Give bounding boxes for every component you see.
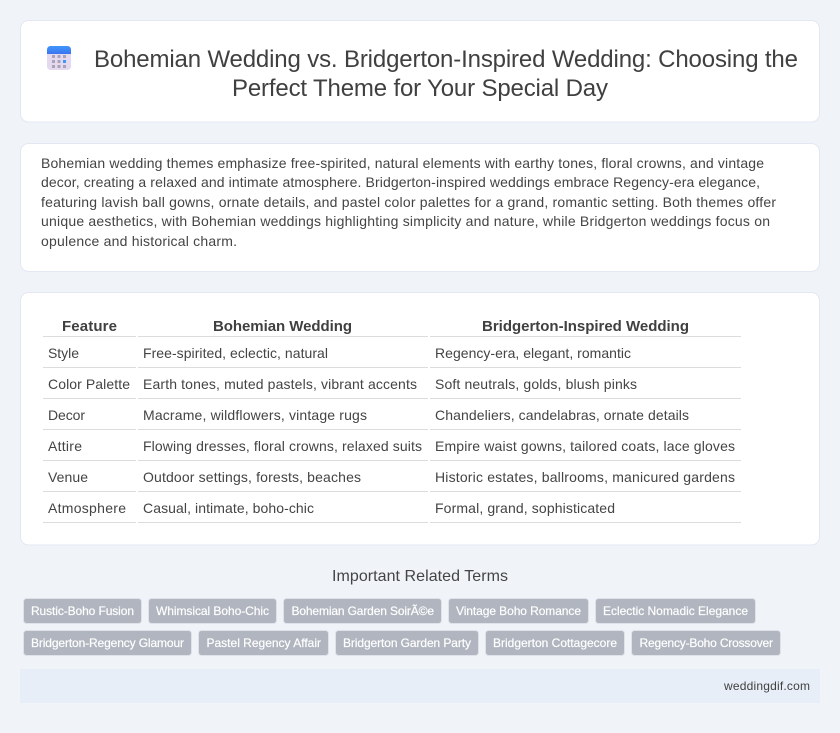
table row: attire bbox=[43, 438, 741, 461]
panel: comparison table card bbox=[20, 292, 820, 545]
title bbox=[94, 46, 798, 102]
tag: Vintage Boho Romance bbox=[448, 598, 588, 624]
table row: style: Regency-era, elegant, romantic bbox=[435, 345, 631, 361]
table row: attire: Attire bbox=[48, 438, 82, 454]
tag: Bridgerton-Regency Glamour: Bridgerton-Regency Glamour bbox=[31, 636, 184, 650]
tag: Bridgerton Cottagecore: Bridgerton Cottagecore bbox=[493, 636, 617, 650]
tag: Eclectic Nomadic Elegance: Eclectic Nomadic Elegance bbox=[603, 604, 748, 618]
panel: description card bbox=[20, 144, 820, 272]
title: Bohemian Wedding vs. Bridgerton-Inspired Wedding: Choosing the bbox=[94, 46, 798, 73]
description text: opulence and historical charm. bbox=[41, 233, 237, 249]
table row: decor bbox=[43, 407, 741, 430]
table row: atmosphere: Formal, grand, sophisticated bbox=[435, 500, 615, 516]
tag: Bridgerton Garden Party bbox=[336, 630, 478, 656]
tag: Pastel Regency Affair bbox=[198, 630, 328, 656]
table header row bbox=[43, 318, 741, 337]
tag: Rustic-Boho Fusion: Rustic-Boho Fusion bbox=[31, 604, 134, 618]
table header row: Feature bbox=[62, 318, 117, 335]
description text bbox=[41, 155, 776, 249]
tag: Rustic-Boho Fusion bbox=[24, 598, 142, 624]
related terms tags bbox=[24, 598, 780, 656]
table header row: Bridgerton-Inspired Wedding bbox=[482, 318, 689, 335]
tag: Bridgerton Cottagecore bbox=[486, 630, 624, 656]
description text: decor, creating a relaxed and intimate atmosphere. Bridgerton-inspired weddings embrace Regency-era elegance, bbox=[41, 174, 760, 190]
footer bar bbox=[20, 669, 820, 703]
table row: style bbox=[43, 345, 741, 368]
tag: Pastel Regency Affair: Pastel Regency Affair bbox=[206, 636, 321, 650]
table row: color palette bbox=[43, 376, 741, 399]
tag: Bohemian Garden Soiree bbox=[284, 598, 442, 624]
tag: Bohemian Garden Soiree: Bohemian Garden SoirÃ©e bbox=[292, 604, 434, 618]
description text: featuring lavish ball gowns, ornate details, and pastel color palettes for a grand, romantic setting. Both themes offer bbox=[41, 194, 776, 210]
table row: venue: Venue bbox=[48, 469, 88, 485]
tag: Vintage Boho Romance: Vintage Boho Romance bbox=[456, 604, 581, 618]
table row: decor: Decor bbox=[48, 407, 85, 423]
heading: important related terms: Important Related Terms bbox=[332, 568, 508, 585]
table row: style: Style bbox=[48, 345, 79, 361]
table row: color palette: Soft neutrals, golds, blush pinks bbox=[435, 376, 637, 392]
table row: atmosphere: Casual, intimate, boho-chic bbox=[143, 500, 314, 516]
icon: calendar bbox=[47, 46, 71, 70]
tag: Bridgerton-Regency Glamour bbox=[24, 630, 192, 656]
tag: Whimsical Boho-Chic: Whimsical Boho-Chic bbox=[156, 604, 269, 618]
table row: venue: Historic estates, ballrooms, manicured gardens bbox=[435, 469, 735, 485]
table row: decor: Macrame, wildflowers, vintage rugs bbox=[143, 407, 367, 423]
table row: color palette: Color Palette bbox=[48, 376, 130, 392]
table row: attire: Flowing dresses, floral crowns, relaxed suits bbox=[143, 438, 422, 454]
table row: decor: Chandeliers, candelabras, ornate details bbox=[435, 407, 689, 423]
tag: Eclectic Nomadic Elegance bbox=[596, 598, 756, 624]
tag: Bridgerton Garden Party: Bridgerton Garden Party bbox=[343, 636, 471, 650]
table row: atmosphere: Atmosphere bbox=[48, 500, 126, 516]
description text: unique aesthetics, with Bohemian weddings highlighting simplicity and nature, while Bridgerton weddings focus on bbox=[41, 213, 770, 229]
table row: color palette: Earth tones, muted pastels, vibrant accents bbox=[143, 376, 417, 392]
table row: atmosphere bbox=[43, 500, 741, 523]
footer source text: weddingdif.com bbox=[723, 679, 810, 693]
panel: title card bbox=[20, 20, 820, 122]
description text: Bohemian wedding themes emphasize free-spirited, natural elements with earthy tones, floral crowns, and vintage bbox=[41, 155, 764, 171]
title: Perfect Theme for Your Special Day bbox=[232, 75, 608, 102]
table row: venue bbox=[43, 469, 741, 492]
table header row: Bohemian Wedding bbox=[213, 318, 352, 335]
table row: attire: Empire waist gowns, tailored coats, lace gloves bbox=[435, 438, 735, 454]
tag: Regency-Boho Crossover bbox=[632, 630, 780, 656]
table row: venue: Outdoor settings, forests, beaches bbox=[143, 469, 361, 485]
tag: Whimsical Boho-Chic bbox=[148, 598, 276, 624]
table row: style: Free-spirited, eclectic, natural bbox=[143, 345, 328, 361]
tag: Regency-Boho Crossover: Regency-Boho Crossover bbox=[640, 636, 773, 650]
